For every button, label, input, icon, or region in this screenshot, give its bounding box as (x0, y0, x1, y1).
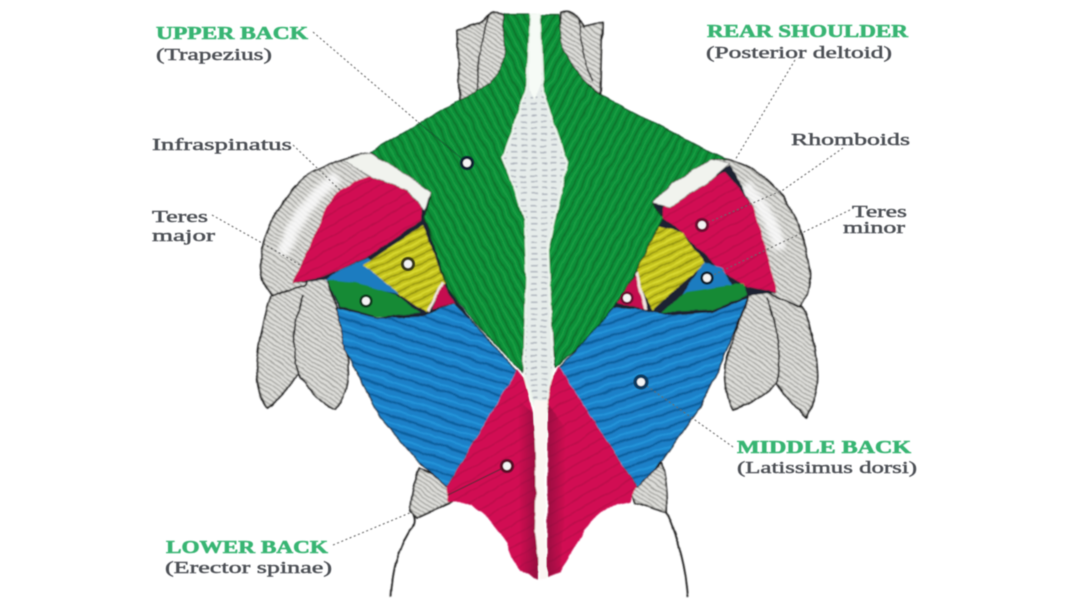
leader middle back (641, 382, 733, 447)
label rhomboids: Rhomboids (791, 130, 910, 149)
rhomboids left (293, 170, 422, 283)
dot small red right (620, 292, 634, 304)
small red right (618, 272, 647, 310)
infraspinatus right (683, 262, 732, 295)
label trapezius: (Trapezius) (156, 45, 272, 64)
label rear shoulder: REAR SHOULDER (707, 21, 909, 41)
label teres minor: Teres (852, 202, 907, 221)
leader teres minor (707, 210, 850, 278)
latissimus dorsi left (336, 303, 517, 487)
triceps right (725, 285, 818, 417)
leader rear shoulder (735, 60, 795, 160)
scapula underlay right (613, 165, 777, 316)
scapular spine collar right (653, 160, 730, 207)
marker dots (360, 156, 714, 473)
leader teres major (212, 215, 300, 265)
label infraspinatus: Infraspinatus (152, 135, 292, 154)
scapula underlay left (293, 177, 473, 322)
label lower back: LOWER BACK (166, 537, 328, 557)
label middle back: MIDDLE BACK (737, 437, 911, 457)
lower spine white stripe (534, 400, 547, 579)
teres major right yellow (637, 227, 705, 310)
upper spine white stripe (529, 14, 541, 100)
erector spinae right (545, 366, 637, 577)
lumbar tissue right (630, 463, 667, 513)
trapezius right (540, 15, 727, 367)
dot trapezius (460, 156, 474, 170)
dot teres major left (401, 257, 415, 271)
dot teres minor left (360, 294, 372, 308)
latissimus dorsi right (558, 297, 748, 487)
trapezius left (370, 14, 531, 373)
leader upper back (313, 32, 418, 122)
dot latissimus (634, 374, 648, 390)
erector shading right (545, 400, 566, 577)
label teres major: Teres (152, 207, 208, 226)
white tendon right (636, 272, 646, 310)
torso outline left (391, 510, 414, 597)
triceps left (257, 275, 348, 410)
leader lower back (333, 512, 412, 545)
teres minor right green (660, 283, 747, 312)
label teres major (152, 207, 216, 245)
torso outline right (667, 513, 688, 597)
label upper back: UPPER BACK (156, 23, 308, 43)
rear deltoid right (712, 158, 810, 307)
erector spinae left (447, 370, 538, 579)
dot infraspinatus right (700, 272, 714, 284)
infraspinatus left (325, 258, 405, 295)
erector shading left (518, 400, 538, 579)
label teres minor (843, 202, 907, 237)
neck muscles left (457, 13, 506, 100)
back muscle anatomy illustration (257, 12, 818, 597)
rhomboids right (662, 172, 777, 293)
dot erector (500, 459, 514, 473)
leader lines (212, 32, 850, 545)
leader infraspinatus (293, 145, 340, 190)
label teres minor: minor (843, 218, 906, 237)
label teres major: major (152, 226, 216, 245)
teres minor left green (327, 280, 420, 317)
small red left (432, 283, 455, 310)
white tendon left (428, 283, 443, 312)
leader rhomboids (702, 148, 843, 225)
teres major left yellow (363, 225, 445, 313)
scapular spine collar left (343, 153, 430, 210)
rear deltoid left (260, 153, 385, 296)
label latissimus dorsi: (Latissimus dorsi) (737, 458, 917, 477)
spine (503, 14, 567, 405)
lumbar tissue left (410, 468, 452, 518)
labels (152, 21, 917, 577)
label erector spinae: (Erector spinae) (165, 558, 332, 577)
label posterior deltoid: (Posterior deltoid) (706, 43, 892, 62)
dot rhomboids right (695, 218, 709, 232)
neck muscles right (558, 12, 602, 95)
